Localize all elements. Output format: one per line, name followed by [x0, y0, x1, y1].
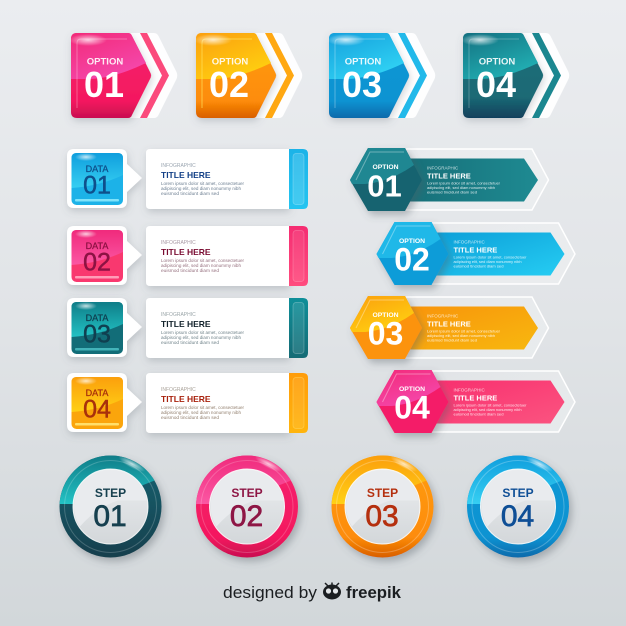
white chevron 03 — [388, 33, 435, 118]
info card 04: euismod tincidunt diam sed — [161, 415, 220, 420]
white chevron 02 — [255, 33, 302, 118]
label option 02: OPTION — [212, 56, 248, 68]
info card 02: TITLE HERE — [161, 247, 211, 257]
data icon 04: DATA — [86, 388, 108, 398]
option label 04: OPTION — [399, 386, 425, 393]
pink hexagon — [376, 370, 448, 433]
data icon 03: DATA — [86, 313, 108, 323]
ribbon text 01: euismod tincidunt diam sed — [427, 190, 477, 194]
step badge 03 — [332, 453, 434, 558]
data icon 02: DATA — [86, 241, 108, 251]
ribbon text 02: adipiscing elit, sed diam nonummy nibh — [454, 259, 522, 264]
ribbon text 02: TITLE HERE — [454, 246, 497, 254]
ribbon text 03: euismod tincidunt diam sed — [427, 338, 477, 342]
label option 01: OPTION — [87, 56, 123, 68]
ribbon text 03: adipiscing elit, sed diam nonummy nibh — [427, 333, 495, 338]
ribbon text 01: TITLE HERE — [427, 172, 471, 180]
option label 01: OPTION — [372, 164, 399, 171]
blue ring — [467, 456, 569, 558]
step face 01 — [73, 469, 148, 544]
number 03: 03 — [342, 64, 382, 105]
ribbon text 04: Lorem ipsum dolor sit amet, consectetuer — [454, 402, 527, 408]
data icon 02 — [72, 230, 123, 282]
step label 01: STEP — [95, 486, 126, 500]
ribbon text 01 — [427, 166, 501, 194]
glass outline 01 — [400, 149, 548, 210]
info card 02: euismod tincidunt diam sed — [161, 268, 220, 273]
pink ribbon — [432, 380, 564, 424]
info card 04: INFOGRAPHIC — [161, 387, 196, 393]
glass outline 03 — [400, 297, 548, 358]
number 02: 02 — [209, 64, 249, 105]
step face 04 — [480, 469, 556, 544]
designed by freepik credit — [223, 582, 402, 602]
ribbon text 03: Lorem ipsum dolor sit amet, consectetuer — [427, 328, 501, 334]
step label 02: STEP — [231, 486, 263, 500]
step face 03 — [345, 469, 420, 544]
ribbon text 03 — [427, 314, 501, 342]
ribbon text 01: Lorem ipsum dolor sit amet, consectetuer — [427, 180, 501, 186]
data row 03 — [67, 298, 308, 358]
teal ring — [60, 456, 162, 558]
info card 02: Lorem ipsum dolor sit amet, consectetuer — [161, 258, 244, 263]
blue ribbon — [432, 232, 564, 276]
speech bubble 02 — [67, 226, 142, 285]
step badge 04 — [467, 453, 569, 558]
info card 03: INFOGRAPHIC — [161, 312, 196, 318]
step face 02 — [210, 469, 284, 544]
teal tag body — [463, 33, 543, 118]
speech bubble 03 — [67, 298, 142, 357]
info card 02 — [146, 226, 308, 286]
option arrow tag 03 — [327, 33, 435, 118]
speech bubble 04 — [67, 373, 142, 432]
blue hexagon — [376, 222, 448, 285]
data icon 03: 03 — [83, 320, 111, 348]
pink chevron stripe — [140, 33, 169, 118]
credit text: designed by — [223, 583, 318, 602]
option number 04: 04 — [394, 390, 430, 426]
step number 01: 01 — [93, 500, 127, 533]
info card 03: euismod tincidunt diam sed — [161, 340, 220, 345]
ribbon text 03: TITLE HERE — [427, 320, 471, 328]
step number 04: 04 — [501, 500, 534, 533]
ribbon text 02: INFOGRAPHIC — [454, 240, 486, 244]
step label 04: STEP — [502, 486, 534, 500]
option arrow tag 02 — [194, 33, 302, 118]
info card 01: TITLE HERE — [161, 170, 211, 180]
data row 01 — [67, 149, 308, 209]
info card 01: adipiscing elit, sed diam nonummy nibh — [161, 186, 242, 191]
white chevron 04 — [522, 33, 569, 118]
teal chevron stripe — [532, 33, 561, 118]
info card 03: adipiscing elit, sed diam nonummy nibh — [161, 335, 242, 340]
data icon 04: 04 — [83, 396, 111, 424]
option arrow tag 01 — [69, 33, 177, 118]
glass outline 02 — [426, 223, 575, 284]
info card 04 — [146, 373, 308, 433]
data icon 01: 01 — [83, 172, 111, 200]
hexagon banner 04 — [376, 370, 575, 433]
info card 01: euismod tincidunt diam sed — [161, 191, 220, 196]
orange chevron stripe — [265, 33, 294, 118]
number 01: 01 — [84, 64, 124, 105]
orange hexagon — [350, 296, 422, 359]
info card 04: adipiscing elit, sed diam nonummy nibh — [161, 410, 242, 415]
ribbon text 02: Lorem ipsum dolor sit amet, consectetuer — [454, 254, 527, 260]
ribbon text 04: TITLE HERE — [454, 394, 497, 402]
ribbon text 04 — [454, 388, 527, 416]
pink tag body — [71, 33, 151, 118]
number 04: 04 — [476, 64, 516, 105]
info card 01 — [146, 149, 308, 209]
option number 01: 01 — [367, 168, 402, 204]
teal ribbon — [405, 158, 538, 202]
info card 03: Lorem ipsum dolor sit amet, consectetuer — [161, 330, 244, 335]
hexagon banner 02 — [376, 222, 575, 285]
info card 02: INFOGRAPHIC — [161, 240, 196, 246]
teal hexagon — [350, 148, 422, 211]
freepik wordmark: freepik — [346, 583, 402, 602]
info card 04: Lorem ipsum dolor sit amet, consectetuer — [161, 405, 244, 410]
info card 03 — [146, 298, 308, 358]
ribbon text 04: adipiscing elit, sed diam nonummy nibh — [454, 407, 522, 412]
data row 02 — [67, 226, 308, 286]
blue chevron stripe — [398, 33, 427, 118]
data icon 02: 02 — [83, 248, 111, 276]
ribbon text 01: adipiscing elit, sed diam nonummy nibh — [427, 185, 495, 190]
info card 04: TITLE HERE — [161, 394, 211, 404]
ribbon text 04: INFOGRAPHIC — [454, 388, 486, 392]
data row 04 — [67, 373, 308, 433]
option label 03: OPTION — [372, 312, 399, 319]
option number 02: 02 — [394, 242, 430, 278]
ribbon text 02: euismod tincidunt diam sed — [454, 264, 504, 268]
step label 03: STEP — [367, 486, 398, 500]
glass outline 04 — [426, 371, 575, 432]
info card 01: INFOGRAPHIC — [161, 163, 196, 169]
blue tag body — [329, 33, 409, 118]
data icon 04 — [72, 377, 123, 429]
data icon 03 — [72, 302, 123, 354]
hexagon banner 01 — [350, 148, 548, 211]
orange tag body — [196, 33, 276, 118]
label option 03: OPTION — [345, 56, 381, 68]
white chevron 01 — [130, 33, 177, 118]
step number 02: 02 — [230, 500, 263, 533]
ribbon text 01: INFOGRAPHIC — [427, 166, 459, 170]
orange ribbon — [405, 306, 538, 350]
icon: freepik mascot — [323, 582, 341, 600]
step badge 01 — [60, 453, 162, 558]
info card 01: Lorem ipsum dolor sit amet, consectetuer — [161, 181, 244, 186]
info card 03: TITLE HERE — [161, 319, 211, 329]
option arrow tag 04 — [461, 33, 569, 118]
pink ring — [196, 456, 298, 558]
step badge 02 — [196, 453, 298, 558]
info card 02: adipiscing elit, sed diam nonummy nibh — [161, 263, 242, 268]
ribbon text 04: euismod tincidunt diam sed — [454, 412, 504, 416]
ribbon text 03: INFOGRAPHIC — [427, 314, 459, 318]
speech bubble 01 — [67, 149, 142, 208]
option number 03: 03 — [368, 316, 403, 352]
ribbon text 02 — [454, 240, 527, 268]
hexagon banner 03 — [350, 296, 548, 359]
step number 03: 03 — [365, 500, 399, 533]
orange ring — [332, 456, 434, 558]
label option 04: OPTION — [479, 56, 515, 68]
option label 02: OPTION — [399, 238, 425, 245]
data icon 01 — [72, 153, 123, 205]
data icon 01: DATA — [86, 164, 108, 174]
